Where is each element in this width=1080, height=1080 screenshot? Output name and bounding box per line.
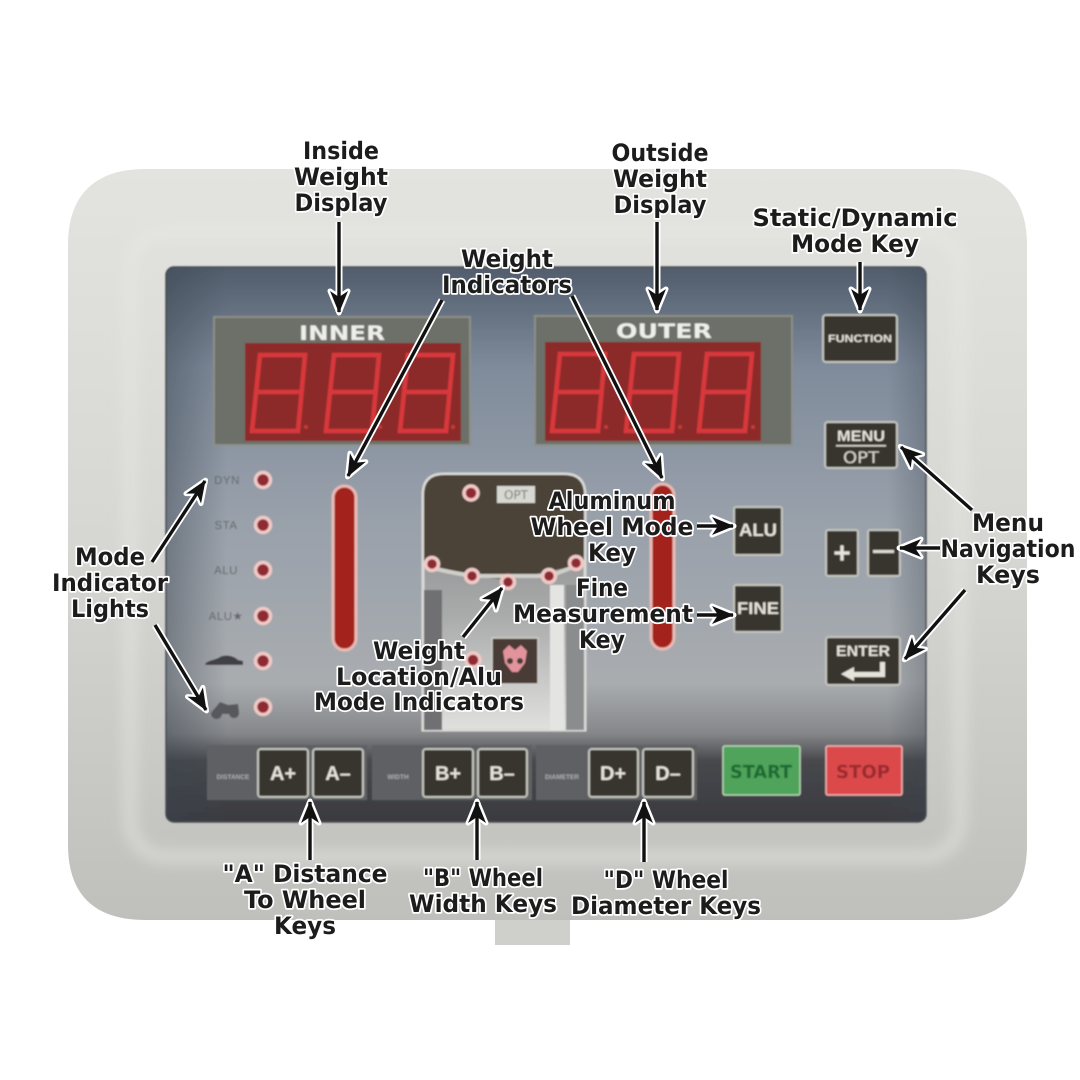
label: fine measurement key: Measurement — [513, 600, 693, 628]
label: D wheel diameter keys: Diameter Keys — [571, 892, 761, 920]
label: mode indicator lights: Lights — [71, 595, 149, 623]
arrow: inside weight display — [336, 222, 342, 312]
label: inside weight display: Weight — [294, 163, 388, 191]
label: mode indicator lights — [52, 543, 168, 623]
label: inside weight display: Display — [294, 189, 388, 217]
label: A distance to wheel keys — [222, 860, 388, 940]
arrow: outside weight display — [654, 222, 660, 310]
label: fine measurement key: Key — [579, 626, 625, 654]
arrow: mode lights up — [152, 481, 205, 562]
label: menu navigation keys — [940, 509, 1076, 589]
width key group — [372, 745, 532, 800]
label: mode indicator lights: Mode — [75, 543, 145, 571]
wheel location diagram: OPT — [504, 488, 529, 502]
label: static dynamic mode key — [752, 204, 958, 258]
outer weight display — [535, 316, 792, 445]
right weight indicator bar — [651, 484, 674, 649]
location indicators — [426, 558, 438, 570]
label: D wheel diameter keys — [571, 866, 761, 920]
label: mode indicator lights: Indicator — [52, 569, 168, 597]
mode indicator lights — [205, 472, 270, 719]
enter key: ENTER — [836, 643, 890, 660]
arrow: left weight indicator — [348, 300, 442, 476]
skull badge — [492, 638, 538, 684]
label: outside weight display: Weight — [613, 165, 707, 193]
arrow: right weight indicator — [572, 296, 662, 478]
arrow: fine key — [697, 612, 733, 618]
label: static dynamic mode key: Mode Key — [791, 230, 919, 258]
mode indicator lights: ALU — [214, 565, 238, 577]
label: inside weight display: Inside — [303, 137, 379, 165]
label: inside weight display — [294, 137, 388, 217]
start button — [723, 746, 800, 795]
fine key — [734, 585, 782, 632]
label: weight location alu mode indicators — [314, 637, 524, 716]
label: aluminum wheel mode key: Wheel Mode — [530, 513, 694, 541]
menu opt key: OPT — [843, 448, 879, 467]
OPT indicator — [464, 486, 478, 500]
plus key: + — [833, 537, 851, 570]
label: weight indicators: Indicators — [442, 271, 572, 299]
wheel location diagram — [423, 474, 585, 730]
diameter key group: DIAMETER — [545, 774, 579, 781]
arrow: minus key — [900, 544, 940, 552]
label: outside weight display: Display — [614, 191, 707, 219]
arrow: alu key — [697, 522, 733, 530]
label: weight location alu mode indicators: Location/Alu — [336, 663, 502, 691]
outer weight display: OUTER — [616, 319, 712, 343]
label: static dynamic mode key: Static/Dynamic — [752, 204, 958, 232]
start button: START — [730, 762, 793, 783]
arrow: static dynamic key — [856, 262, 864, 310]
arrow: menu key — [901, 447, 972, 510]
label: weight indicators: Weight — [461, 245, 553, 273]
stop button — [826, 746, 902, 795]
diameter key group: D– — [655, 763, 681, 785]
distance key group — [207, 745, 367, 800]
distance key group: A– — [325, 763, 351, 785]
arrow: enter key — [905, 590, 965, 659]
bezel inner highlight — [130, 232, 960, 857]
label: fine measurement key — [513, 574, 693, 654]
diameter key group: D+ — [600, 763, 626, 785]
diameter key group — [536, 745, 697, 800]
left weight indicator bar — [333, 486, 356, 650]
arrow: D keys — [640, 802, 648, 862]
label: outside weight display: Outside — [612, 139, 708, 167]
label: weight location alu mode indicators: Mode Indicators — [314, 688, 524, 716]
distance key group: DISTANCE — [217, 774, 250, 781]
label: B wheel width keys — [409, 864, 557, 918]
fine key: FINE — [737, 599, 779, 618]
function key: FUNCTION — [828, 333, 892, 345]
function key — [823, 315, 897, 362]
label: fine measurement key: Fine — [576, 574, 628, 602]
width key group: WIDTH — [387, 774, 409, 781]
label: A distance to wheel keys: To Wheel — [244, 886, 366, 914]
enter key — [826, 637, 900, 685]
label: aluminum wheel mode key: Key — [588, 539, 636, 567]
label: B wheel width keys: "B" Wheel — [423, 864, 543, 892]
alu key — [734, 507, 782, 555]
inner weight display: INNER — [299, 321, 385, 345]
inner weight display — [214, 317, 470, 445]
arrow: A keys — [306, 802, 314, 860]
label: weight location alu mode indicators: Weight — [373, 637, 465, 665]
label: outside weight display — [612, 139, 708, 219]
label: A distance to wheel keys: "A" Distance — [222, 860, 388, 888]
menu opt key — [825, 422, 897, 468]
label: menu navigation keys: Keys — [976, 561, 1040, 589]
label: aluminum wheel mode key — [530, 487, 694, 567]
device stem — [495, 915, 570, 945]
label: aluminum wheel mode key: Aluminum — [548, 487, 676, 515]
mode indicator lights: STA — [214, 520, 238, 532]
arrow: mode lights down — [155, 625, 206, 710]
label: A distance to wheel keys: Keys — [274, 912, 336, 940]
control panel — [166, 267, 926, 822]
plus key — [826, 530, 858, 576]
mode indicator lights: DYN — [214, 475, 240, 487]
label: D wheel diameter keys: "D" Wheel — [604, 866, 728, 894]
width key group: B– — [489, 763, 515, 785]
arrow: weight location — [463, 588, 502, 637]
label: B wheel width keys: Width Keys — [409, 890, 557, 918]
mode indicator lights: ALU★ — [209, 611, 243, 623]
arrow: B keys — [474, 802, 480, 860]
label: weight indicators — [442, 245, 572, 299]
alu key: ALU — [739, 520, 777, 540]
minus key — [868, 530, 900, 576]
stop button: STOP — [836, 762, 890, 783]
device bezel — [68, 169, 1027, 920]
menu opt key: MENU — [837, 428, 885, 445]
label: menu navigation keys: Menu — [972, 509, 1044, 537]
width key group: B+ — [435, 763, 461, 785]
distance key group: A+ — [270, 763, 296, 785]
